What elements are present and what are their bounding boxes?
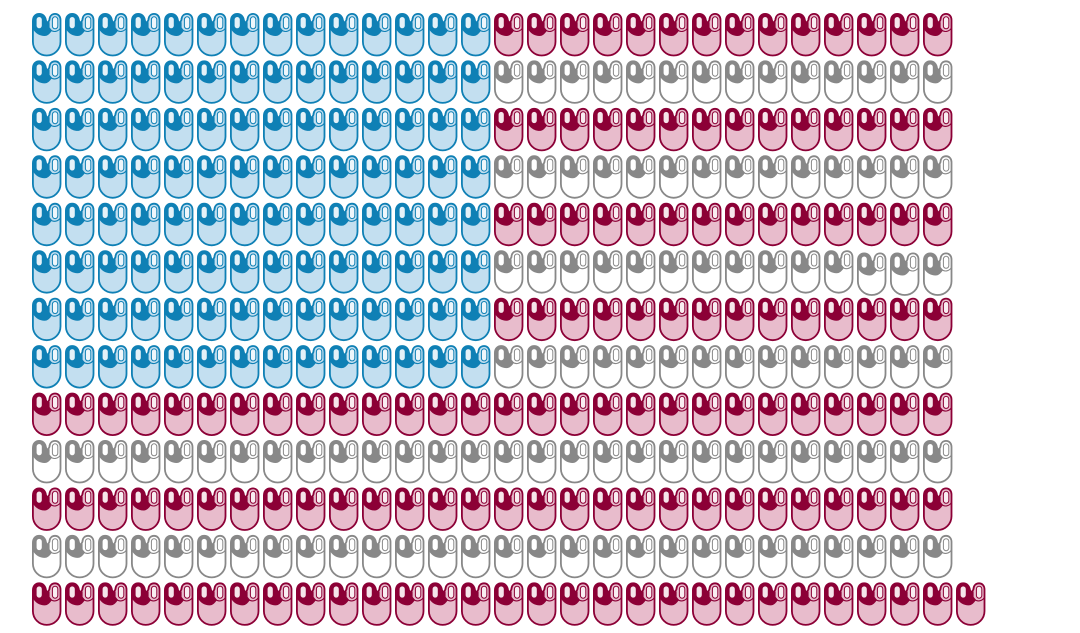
row 11: red mouse icons	[33, 488, 951, 530]
row 4: blue and grey mouse icons	[33, 156, 951, 198]
row 13: red mouse icons with one extra	[33, 583, 984, 625]
row 6: blue and grey mouse icons, last three slightly lower	[33, 251, 951, 295]
row 3: blue and red mouse icons	[33, 109, 951, 150]
row 9: red mouse icons	[33, 394, 951, 435]
row 1: blue and red mouse icons	[33, 14, 951, 55]
row 12: grey mouse icons	[33, 536, 951, 577]
row 8: blue and grey mouse icons	[33, 346, 951, 388]
row 7: blue and red mouse icons	[33, 299, 951, 340]
row 10: grey mouse icons	[33, 441, 951, 482]
row 5: blue and red mouse icons	[33, 204, 951, 245]
row 2: blue and grey mouse icons	[33, 61, 951, 103]
